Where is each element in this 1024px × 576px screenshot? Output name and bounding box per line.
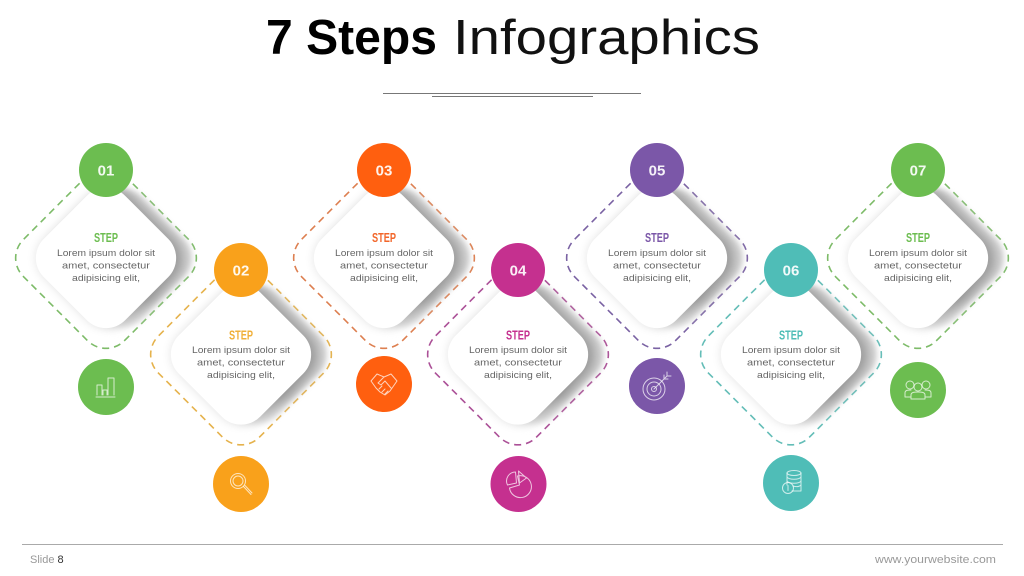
- step 02 number badge: [214, 243, 268, 297]
- dashed outline: [5, 157, 207, 359]
- body text: adipisicing elit,: [350, 273, 418, 284]
- body text: adipisicing elit,: [72, 273, 140, 284]
- dashed outline: [556, 157, 758, 359]
- step 02 number badge: 02: [233, 262, 249, 280]
- body text: adipisicing elit,: [884, 273, 952, 284]
- step label: STEP: [372, 231, 396, 245]
- step 02 diamond: [140, 253, 342, 456]
- body text: Lorem ipsum dolor sit: [742, 345, 840, 356]
- white card: [710, 273, 872, 436]
- website: www.yourwebsite.com: [874, 554, 996, 566]
- body text: amet, consectetur: [613, 260, 701, 272]
- step label: STEP: [906, 231, 930, 245]
- shadow: [25, 177, 203, 339]
- step label: STEP: [229, 328, 253, 342]
- icon: pie chart: [490, 456, 546, 512]
- step 03 number badge: [357, 143, 411, 197]
- shadow: [303, 177, 481, 339]
- body text: adipisicing elit,: [623, 273, 691, 284]
- body text: amet, consectetur: [747, 358, 835, 368]
- icon: coins: [763, 455, 819, 511]
- body text: amet, consectetur: [197, 358, 285, 368]
- slide number: Slide 8: [30, 554, 64, 566]
- body text: amet, consectetur: [874, 260, 962, 272]
- body text: adipisicing elit,: [757, 370, 825, 381]
- step 01 number badge: 01: [98, 162, 114, 180]
- step 06 diamond: [690, 253, 892, 456]
- dashed outline: [417, 253, 619, 456]
- step 04 diamond: [417, 253, 619, 456]
- step 06 number badge: 06: [783, 262, 799, 280]
- step 01 diamond: [5, 157, 207, 359]
- white card: [576, 177, 738, 339]
- step 04 number badge: [491, 243, 545, 297]
- icon: target: [629, 358, 685, 414]
- icon: handshake: [356, 356, 412, 412]
- body text: Lorem ipsum dolor sit: [869, 248, 967, 259]
- body text: amet, consectetur: [340, 260, 428, 272]
- white card: [437, 273, 599, 436]
- title: 7 Steps: [266, 11, 437, 65]
- title underline: [383, 94, 641, 96]
- step label: STEP: [506, 328, 530, 342]
- white card: [160, 273, 322, 436]
- step label: STEP: [645, 231, 669, 245]
- step 05 number badge: [630, 143, 684, 197]
- step 05 number badge: 05: [649, 162, 665, 180]
- step 07 diamond: [817, 157, 1019, 359]
- step 03 number badge: 03: [376, 162, 392, 180]
- white card: [837, 177, 999, 339]
- shadow: [576, 177, 754, 339]
- body text: Lorem ipsum dolor sit: [57, 248, 155, 259]
- footer rule: [22, 544, 1003, 546]
- white card: [25, 177, 187, 339]
- dashed outline: [140, 253, 342, 456]
- shadow: [437, 273, 615, 436]
- shadow: [710, 273, 888, 436]
- body text: amet, consectetur: [62, 260, 150, 272]
- shadow: [160, 273, 338, 436]
- body text: amet, consectetur: [474, 358, 562, 368]
- body text: Lorem ipsum dolor sit: [469, 345, 567, 356]
- white card: [303, 177, 465, 339]
- step 03 diamond: [283, 157, 485, 359]
- step label: STEP: [94, 231, 118, 245]
- step 05 diamond: [556, 157, 758, 359]
- body text: Lorem ipsum dolor sit: [608, 248, 706, 259]
- step 01 number badge: [79, 143, 133, 197]
- step 07 number badge: 07: [910, 162, 926, 180]
- icon: people: [890, 362, 946, 418]
- dashed outline: [817, 157, 1019, 359]
- step 06 number badge: [764, 243, 818, 297]
- body text: adipisicing elit,: [484, 370, 552, 381]
- body text: Lorem ipsum dolor sit: [192, 345, 290, 356]
- title light part: Infographics: [453, 11, 760, 65]
- step 04 number badge: 04: [510, 262, 527, 280]
- dashed outline: [690, 253, 892, 456]
- dashed outline: [283, 157, 485, 359]
- shadow: [837, 177, 1015, 339]
- body text: Lorem ipsum dolor sit: [335, 248, 433, 259]
- step 07 number badge: [891, 143, 945, 197]
- step label: STEP: [779, 328, 803, 342]
- body text: adipisicing elit,: [207, 370, 275, 381]
- icon: bar chart: [78, 359, 134, 415]
- icon: magnifier: [213, 456, 269, 512]
